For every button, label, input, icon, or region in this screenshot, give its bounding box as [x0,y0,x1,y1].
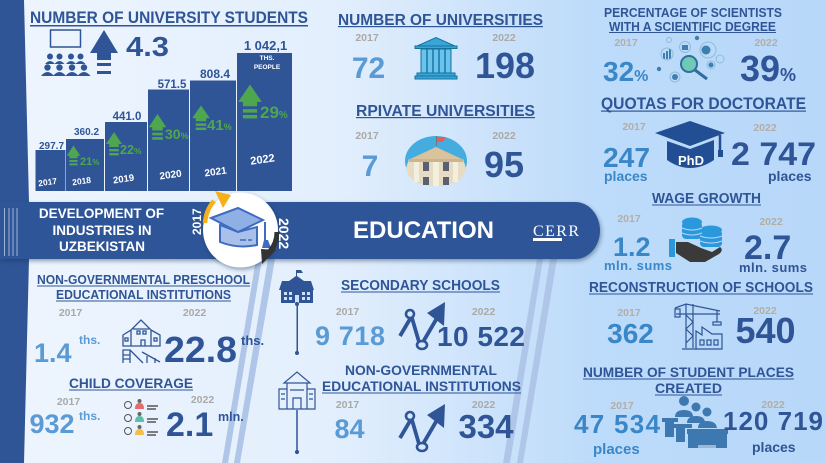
heading: student places [583,364,794,396]
panel: non-governmental educational institutions: 2022 [472,399,495,411]
panel: private universities [355,103,535,186]
bar chart: 2020 [159,168,183,183]
panel: secondary schools: 2017 [336,306,359,318]
heading: child coverage: CHILD COVERAGE [69,375,193,391]
year label 2022: 2022 [276,218,292,249]
icon: university building [415,38,457,79]
icon: PhD cap: PhD [678,153,704,168]
bar chart [36,38,292,191]
heading: student places: NUMBER OF STUDENT PLACES [583,364,794,380]
bar chart: 2022 [250,152,276,168]
panel: number of university students [30,8,308,191]
panel: student places created: 120 719 [723,406,823,436]
panel: child coverage: 2022 [191,394,214,406]
diagonal stripes [222,259,557,463]
icon: university photo [405,136,467,186]
panel: child coverage: ths. [79,409,100,423]
panel: quotas for doctorate: 2017 [622,121,646,133]
bar chart: 808.4 [200,67,230,81]
panel: wage growth: 2017 [617,213,641,225]
icon: students at desks [662,396,728,448]
left sidebar [0,0,29,463]
icon: PhD cap [655,121,725,168]
panel: wage growth: mln. sums [739,260,807,275]
panel: scientists: 39% [740,48,796,89]
icon: graduation cap badge [203,192,278,268]
panel: reconstruction of schools: 540 [735,310,796,351]
panel: number of universities: 72 [352,52,385,85]
panel: scientists: 32% [603,56,648,87]
panel: non-governmental educational institutions: 334 [458,408,514,445]
panel: wage growth [604,191,807,275]
panel: secondary schools [279,270,525,355]
bar chart: 2021 [204,165,228,180]
bar chart: 2017 [38,176,58,188]
heading: institutions: NON-GOVERNMENTAL [345,362,497,378]
panel: non-governmental educational institutions: 2017 [336,399,359,411]
bar chart: 1 042,1 [244,38,287,53]
bar chart: 41% [207,117,232,134]
panel: child coverage: 2.1 [166,406,213,444]
banner text: development of industries: INDUSTRIES IN [52,223,152,238]
arrow: dark [261,232,277,264]
bar chart: 22% [120,143,142,157]
panel: private universities: 2017 [355,130,379,142]
panel: scientists [603,6,796,89]
panel: preschool institutions: 2022 [183,307,206,319]
panel: wage growth: 2.7 [744,229,791,267]
bar chart: 360.2 [74,127,99,138]
panel: quotas for doctorate: places [604,168,648,184]
panel: secondary schools: 2022 [472,306,495,318]
heading: student places: CREATED [655,380,722,396]
logo: CERR: CERR [533,223,579,240]
panel: non-governmental educational institutions [279,362,521,454]
panel: child coverage: mln. [218,410,244,424]
heading: number of universities: NUMBER OF UNIVERSITIES [338,12,543,29]
panel: number of universities: 198 [475,45,535,86]
panel: wage growth: mln. sums [604,258,672,273]
panel: private universities: 7 [362,150,378,183]
icon: school outline with pin line [279,372,315,454]
panel: wage growth: 2022 [759,216,783,228]
panel: wage growth: 1.2 [613,232,651,262]
panel: reconstruction of schools: 2017 [617,307,641,319]
heading: institutions: EDUCATIONAL INSTITUTIONS [322,378,521,394]
panel: quotas for doctorate: 2 747 [731,136,816,172]
panel: reconstruction of schools: 362 [607,318,654,349]
panel: scientists: 2017 [614,37,638,49]
banner text: development of industries: DEVELOPMENT OF [39,206,164,221]
panel: student places created: 2017 [610,400,634,412]
panel: preschool institutions: ths. [241,333,264,348]
bar chart: 2019 [112,173,135,186]
panel: secondary schools: 9 718 [315,321,385,351]
icon: classroom [41,30,90,76]
icon: growth arrow [400,302,445,349]
bar chart: 21% [80,156,99,168]
panel: student places created: 2022 [761,399,785,411]
heading: secondary schools: SECONDARY SCHOOLS [341,278,500,294]
panel: private universities: 2022 [492,130,516,142]
panel: reconstruction of schools [589,280,813,351]
heading: scientists [604,6,782,34]
heading: quotas: QUOTAS FOR DOCTORATE [601,94,806,113]
heading: preschool [37,273,250,302]
panel: reconstruction of schools: 2022 [753,305,777,317]
bar chart: THS. [260,55,275,62]
icon: school with pin line [279,270,314,355]
bar chart: PEOPLE [254,64,281,71]
heading: scientists: WITH A SCIENTIFIC DEGREE [609,20,776,34]
panel: secondary schools: 10 522 [437,321,525,352]
panel: student places created: places [593,441,640,458]
icon: growth arrow [400,404,445,451]
icon: checklist [124,399,158,435]
panel: quotas for doctorate: 247 [603,142,650,173]
panel: preschool institutions [34,273,264,370]
heading: scientists: PERCENTAGE OF SCIENTISTS [604,6,782,20]
panel: preschool institutions: ths. [79,333,100,347]
panel: child coverage [30,375,244,444]
panel: number of universities: 2017 [355,32,379,44]
banner text: development of industries [39,206,164,254]
heading: preschool: NON-GOVERNMENTAL PRESCHOOL [37,273,250,287]
icon: magnifier network [657,36,724,82]
panel: student places created: 47 534 [574,409,661,439]
panel: scientists: 2022 [754,37,778,49]
heading: university students: NUMBER OF UNIVERSITY STUDENTS [30,8,308,27]
banner text: development of industries: UZBEKISTAN [59,239,145,254]
icon: crane and factory [675,304,722,349]
icon: preschool building [123,320,160,363]
central banner [0,191,600,268]
panel: student places created [574,364,823,458]
panel: number of universities [338,12,543,86]
bar chart: 2018 [72,175,92,187]
growth factor: 4.3 [126,31,169,62]
panel: quotas for doctorate [601,94,816,184]
panel: preschool institutions: 1.4 [34,338,72,368]
year label 2017: 2017 [190,208,204,235]
banner title: education: EDUCATION [353,217,494,244]
heading: reconstruction: RECONSTRUCTION OF SCHOOLS [589,280,813,296]
heading: institutions [322,362,521,394]
bar chart: 29% [260,103,288,122]
heading: wage growth: WAGE GROWTH [652,191,761,207]
panel: non-governmental educational institutions: 84 [334,414,365,444]
panel: preschool institutions: 22.8 [164,329,237,370]
panel: quotas for doctorate: 2022 [753,122,777,134]
arrow: yellow [205,191,231,223]
heading: preschool: EDUCATIONAL INSTITUTIONS [56,288,231,302]
bar chart: 297.7 [39,141,64,152]
panel: private universities: 95 [484,144,524,185]
panel: preschool institutions: 2017 [59,307,82,319]
icon: up arrow [90,30,118,74]
bar chart: 571.5 [158,79,187,91]
panel: student places created: places [752,439,796,455]
panel: number of universities: 2022 [492,32,516,44]
heading: private universities: RPIVATE UNIVERSITIES [356,103,535,120]
icon: hand with coins [669,218,722,262]
bar chart: 30% [165,126,189,142]
bar chart: 441.0 [113,111,141,123]
panel: child coverage: 2017 [57,396,80,408]
panel: quotas for doctorate: places [768,168,812,184]
panel: child coverage: 932 [30,409,75,439]
